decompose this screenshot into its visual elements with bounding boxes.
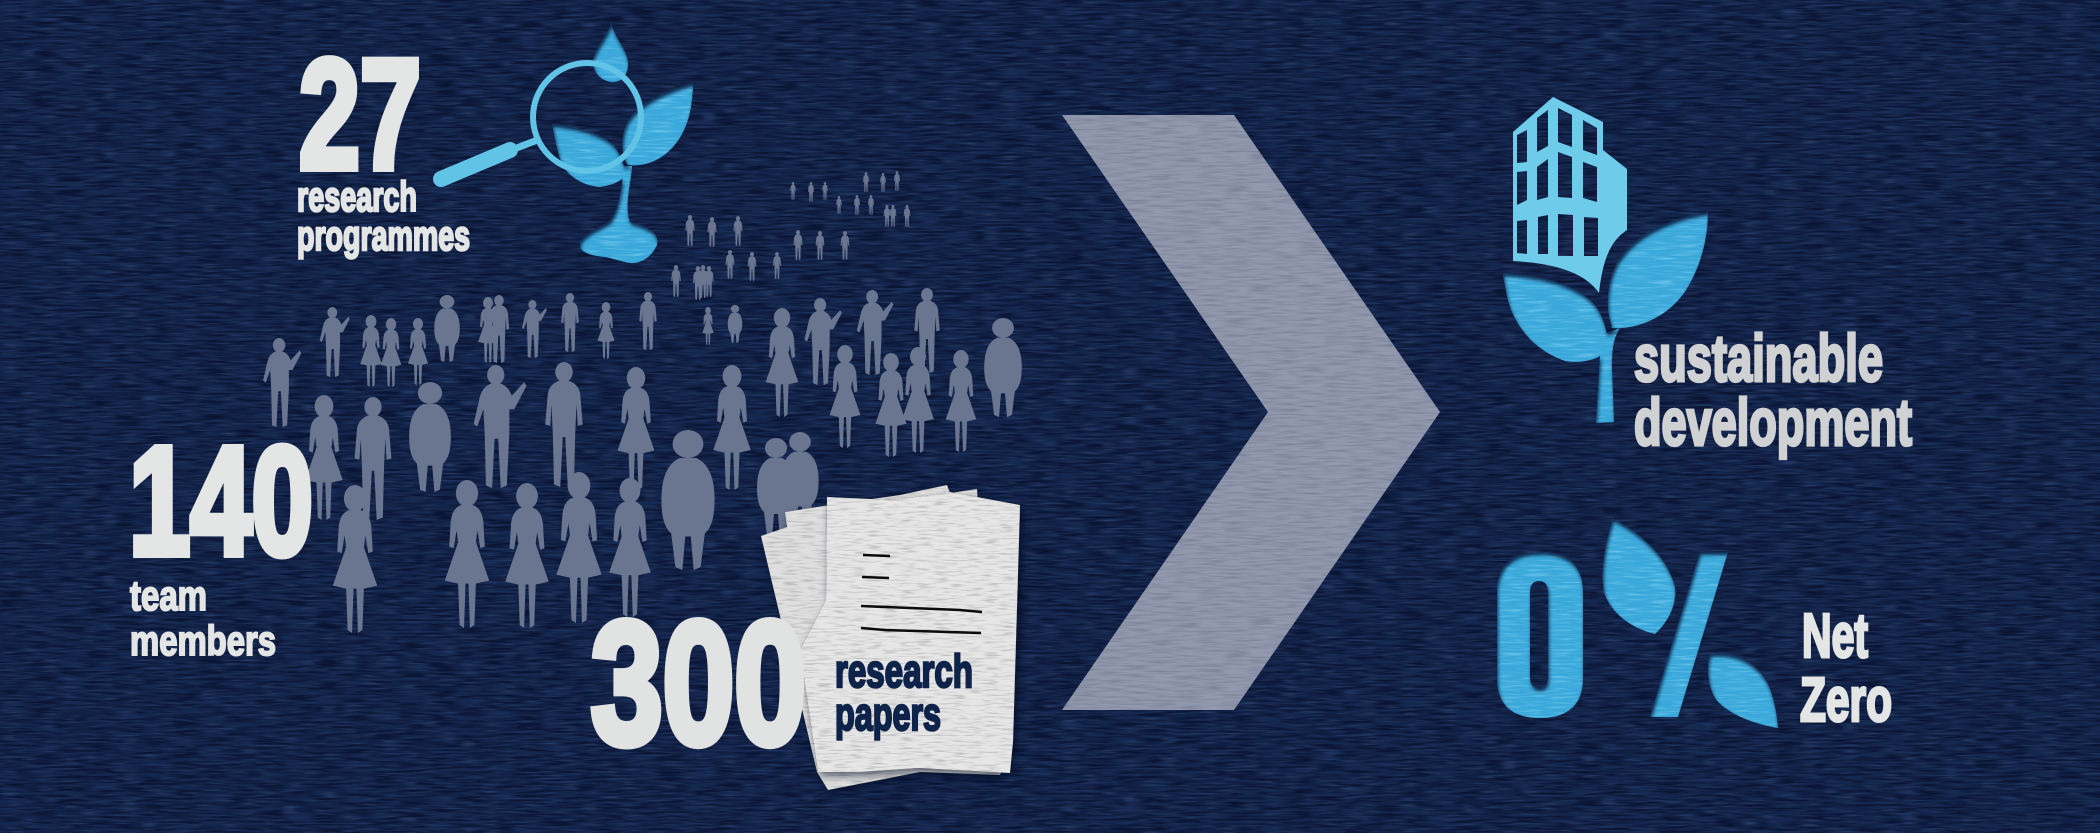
label: sustainable development	[1634, 321, 1912, 459]
statistic: 140 team members: 140	[129, 415, 313, 587]
text lines on paper	[861, 555, 982, 633]
icon: magnifier ring and handle	[441, 63, 641, 179]
statistic: 140 team members: team	[130, 572, 207, 619]
icon: plant with droplet	[552, 23, 693, 263]
statistic: 140 team members	[129, 415, 313, 664]
paper label: research	[835, 645, 973, 697]
label: sustainable development: development	[1634, 385, 1912, 459]
icon: stack of research papers	[761, 485, 1020, 790]
paper label: papers	[835, 688, 941, 740]
icon: building	[1513, 97, 1627, 293]
label: sustainable development: sustainable	[1634, 321, 1883, 395]
icon: magnifying glass over plant	[441, 23, 693, 263]
icon: plant leaves	[1503, 212, 1708, 423]
statistic: 27 research programmes: 27	[299, 28, 421, 202]
percent slash	[1650, 552, 1728, 717]
percent lower leaf	[1708, 653, 1778, 728]
icon: zero percent made of leaves	[1497, 519, 1778, 728]
front sheet	[800, 492, 1020, 773]
crowd of team members silhouettes	[263, 171, 1022, 633]
zero	[1497, 552, 1583, 718]
arrow: large chevron	[1062, 115, 1440, 710]
label: Net Zero: Zero	[1800, 666, 1892, 735]
statistic: 27 research programmes: research	[297, 173, 417, 220]
icon: building growing from plant	[1503, 97, 1708, 423]
paper label	[835, 645, 973, 740]
statistic: 140 team members: members	[130, 617, 276, 664]
label: Net Zero: Net	[1802, 602, 1868, 671]
statistic: 27 research programmes: programmes	[297, 212, 470, 259]
back sheets	[761, 485, 1020, 790]
statistic: 300: 300	[591, 585, 806, 780]
label: Net Zero	[1800, 602, 1892, 735]
percent upper leaf	[1603, 519, 1675, 634]
